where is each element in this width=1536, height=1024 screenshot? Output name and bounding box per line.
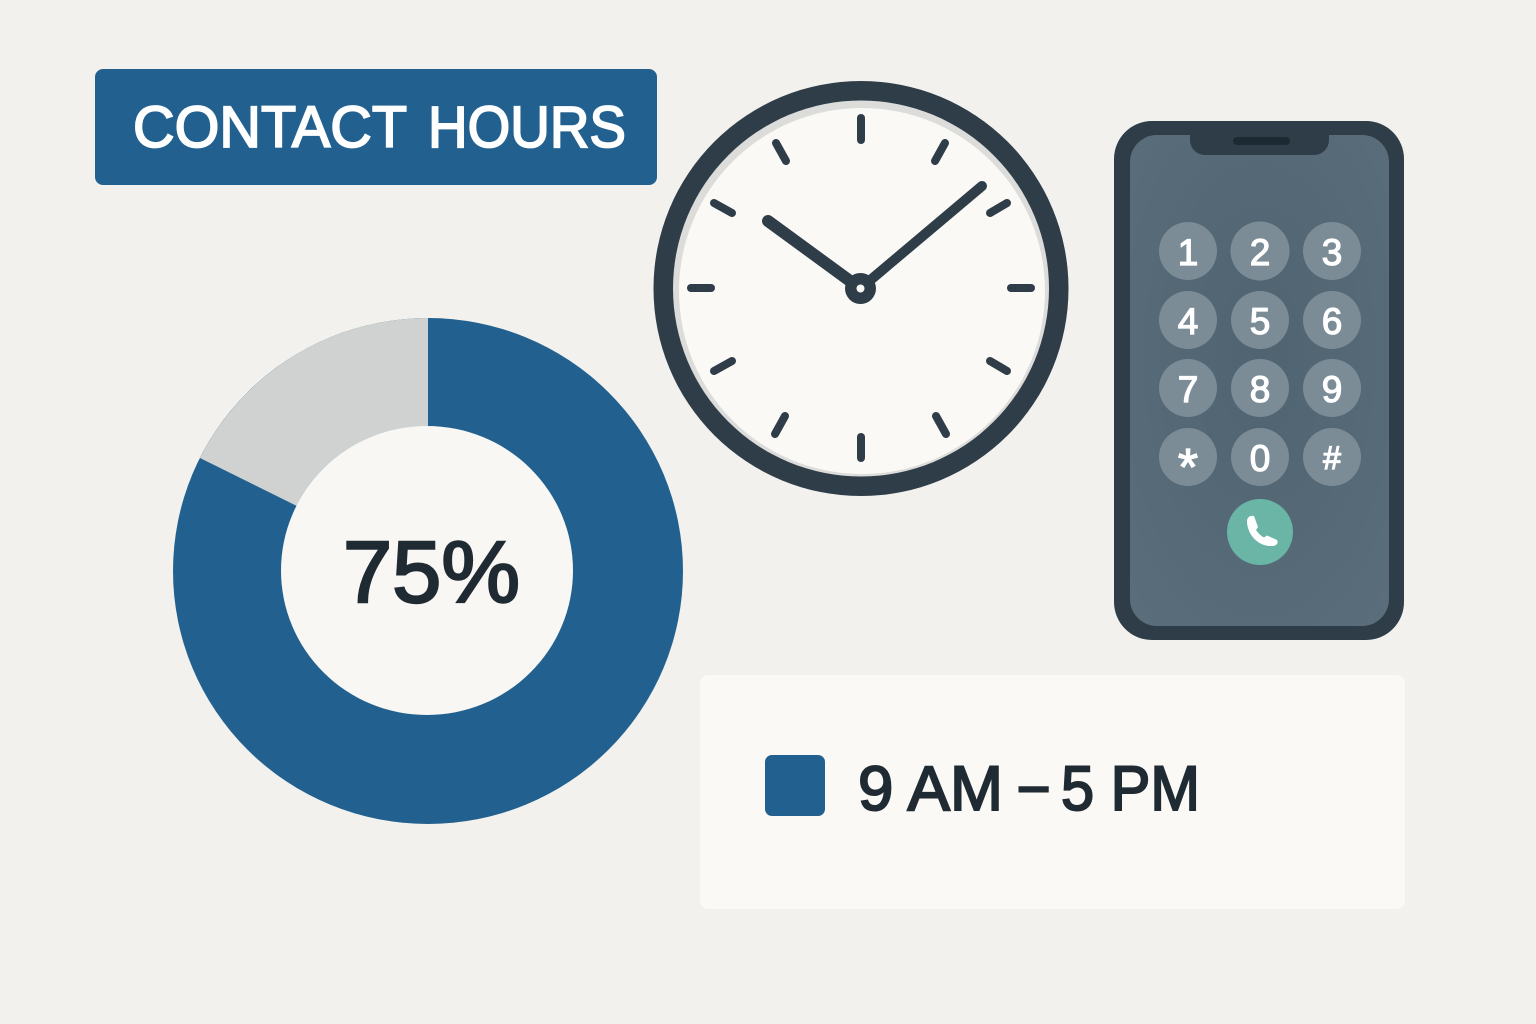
legend swatch [765,755,825,816]
donut grey segment [200,318,428,571]
legend label: – [1020,759,1048,813]
phone notch [1190,133,1329,155]
icon: wall clock [654,81,1068,496]
percentage label: 75% [343,524,520,621]
keypad: # [1323,440,1341,476]
phone screen [1130,135,1389,626]
legend label [858,754,1200,824]
call button [1227,499,1293,565]
donut centre [281,426,573,715]
phone speaker [1233,137,1290,145]
keypad: 2 [1250,232,1270,273]
keypad: 3 [1322,232,1342,273]
title text: HOURS [428,95,626,160]
keypad: 4 [1178,301,1198,342]
clock tick marks [691,118,1031,458]
legend label: 9 AM [858,754,1003,824]
icon: handset [1247,516,1278,546]
legend panel [700,675,1405,909]
keypad: 7 [1178,369,1198,410]
keypad [1159,222,1361,497]
legend label: 5 PM [1061,754,1200,824]
icon: smartphone [1114,121,1404,640]
keypad: * [1178,439,1198,497]
title text [133,95,626,160]
title text: CONTACT [133,95,407,160]
title banner [95,69,657,185]
keypad: 1 [1178,232,1198,273]
keypad: 5 [1250,301,1270,342]
keypad: 6 [1322,301,1342,342]
keypad: 8 [1250,369,1270,410]
clock hour hand [768,221,861,289]
keypad: 9 [1322,369,1342,410]
keypad: 0 [1250,438,1270,479]
clock minute hand [861,186,982,288]
clock hub [845,273,876,304]
donut chart [173,318,683,824]
